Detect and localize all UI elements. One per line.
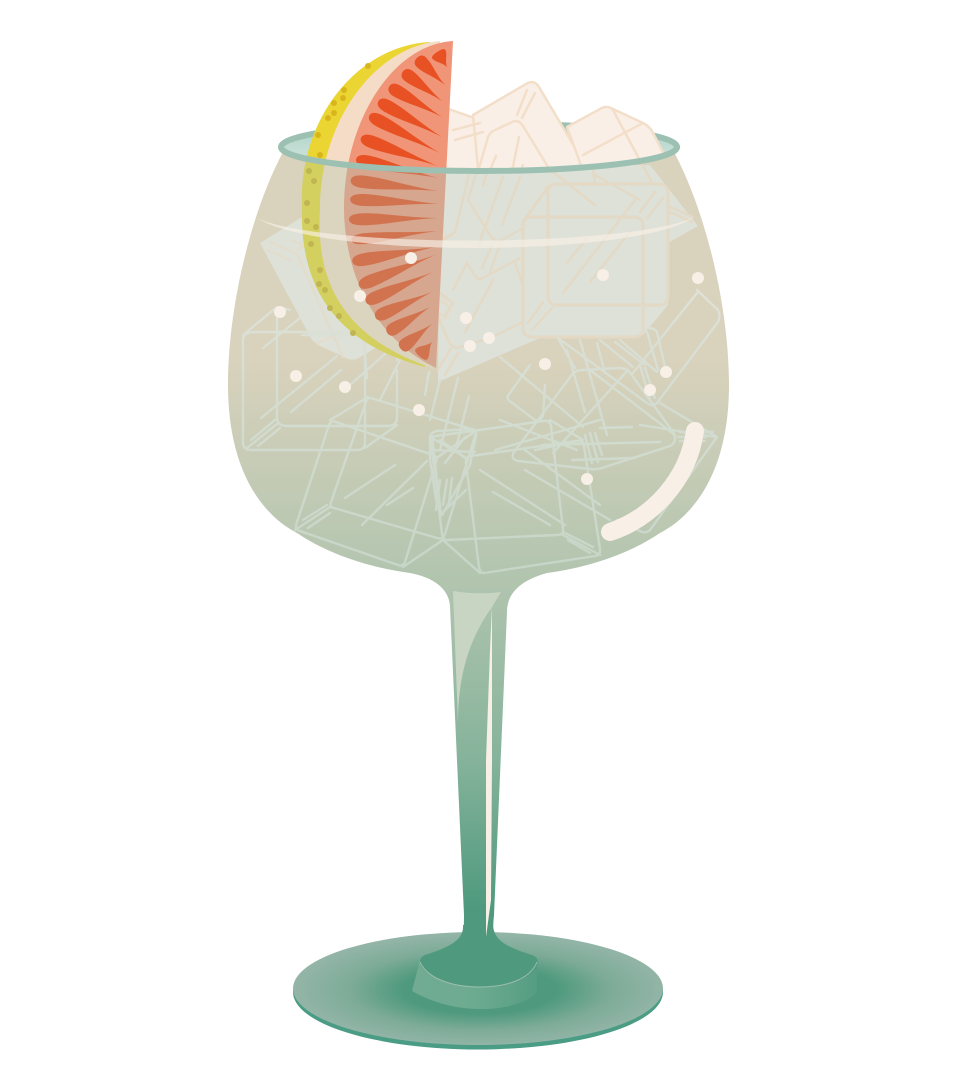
- central submerged ice fill: [438, 165, 698, 382]
- cube: small centre: [425, 372, 476, 515]
- cube: lower left: [295, 320, 477, 567]
- cube: far right: [500, 290, 720, 532]
- front rim of glass: [281, 147, 677, 171]
- stem highlight: [453, 591, 501, 723]
- glass highlight arc: [610, 431, 695, 532]
- lower ice cube outlines: [243, 290, 720, 573]
- left submerged cube fill: [260, 217, 376, 360]
- foot edge: [293, 934, 663, 1050]
- foot collar: [412, 960, 537, 1009]
- front right ice cube: [523, 184, 668, 337]
- stem white reflection: [486, 606, 492, 937]
- left cube outlines: [267, 225, 450, 357]
- cube: left: [243, 300, 398, 450]
- flare outline: [420, 962, 537, 987]
- waterline highlight: [257, 218, 693, 248]
- bubbles: [274, 252, 704, 485]
- ice cubes below the waterline: [260, 160, 698, 382]
- rim opening: [281, 123, 677, 171]
- central cube outlines: [435, 160, 693, 375]
- stem base flare: [420, 925, 538, 987]
- grapefruit slice below waterline: [302, 162, 446, 368]
- glass foot: [293, 925, 663, 1050]
- cube: right diamond: [495, 338, 675, 520]
- glass bowl and stem: [228, 152, 729, 935]
- foot top surface: [293, 932, 663, 1045]
- cube: bottom centre: [430, 420, 600, 573]
- ice cubes above the waterline: [446, 80, 664, 174]
- grapefruit slice above waterline: [307, 41, 453, 174]
